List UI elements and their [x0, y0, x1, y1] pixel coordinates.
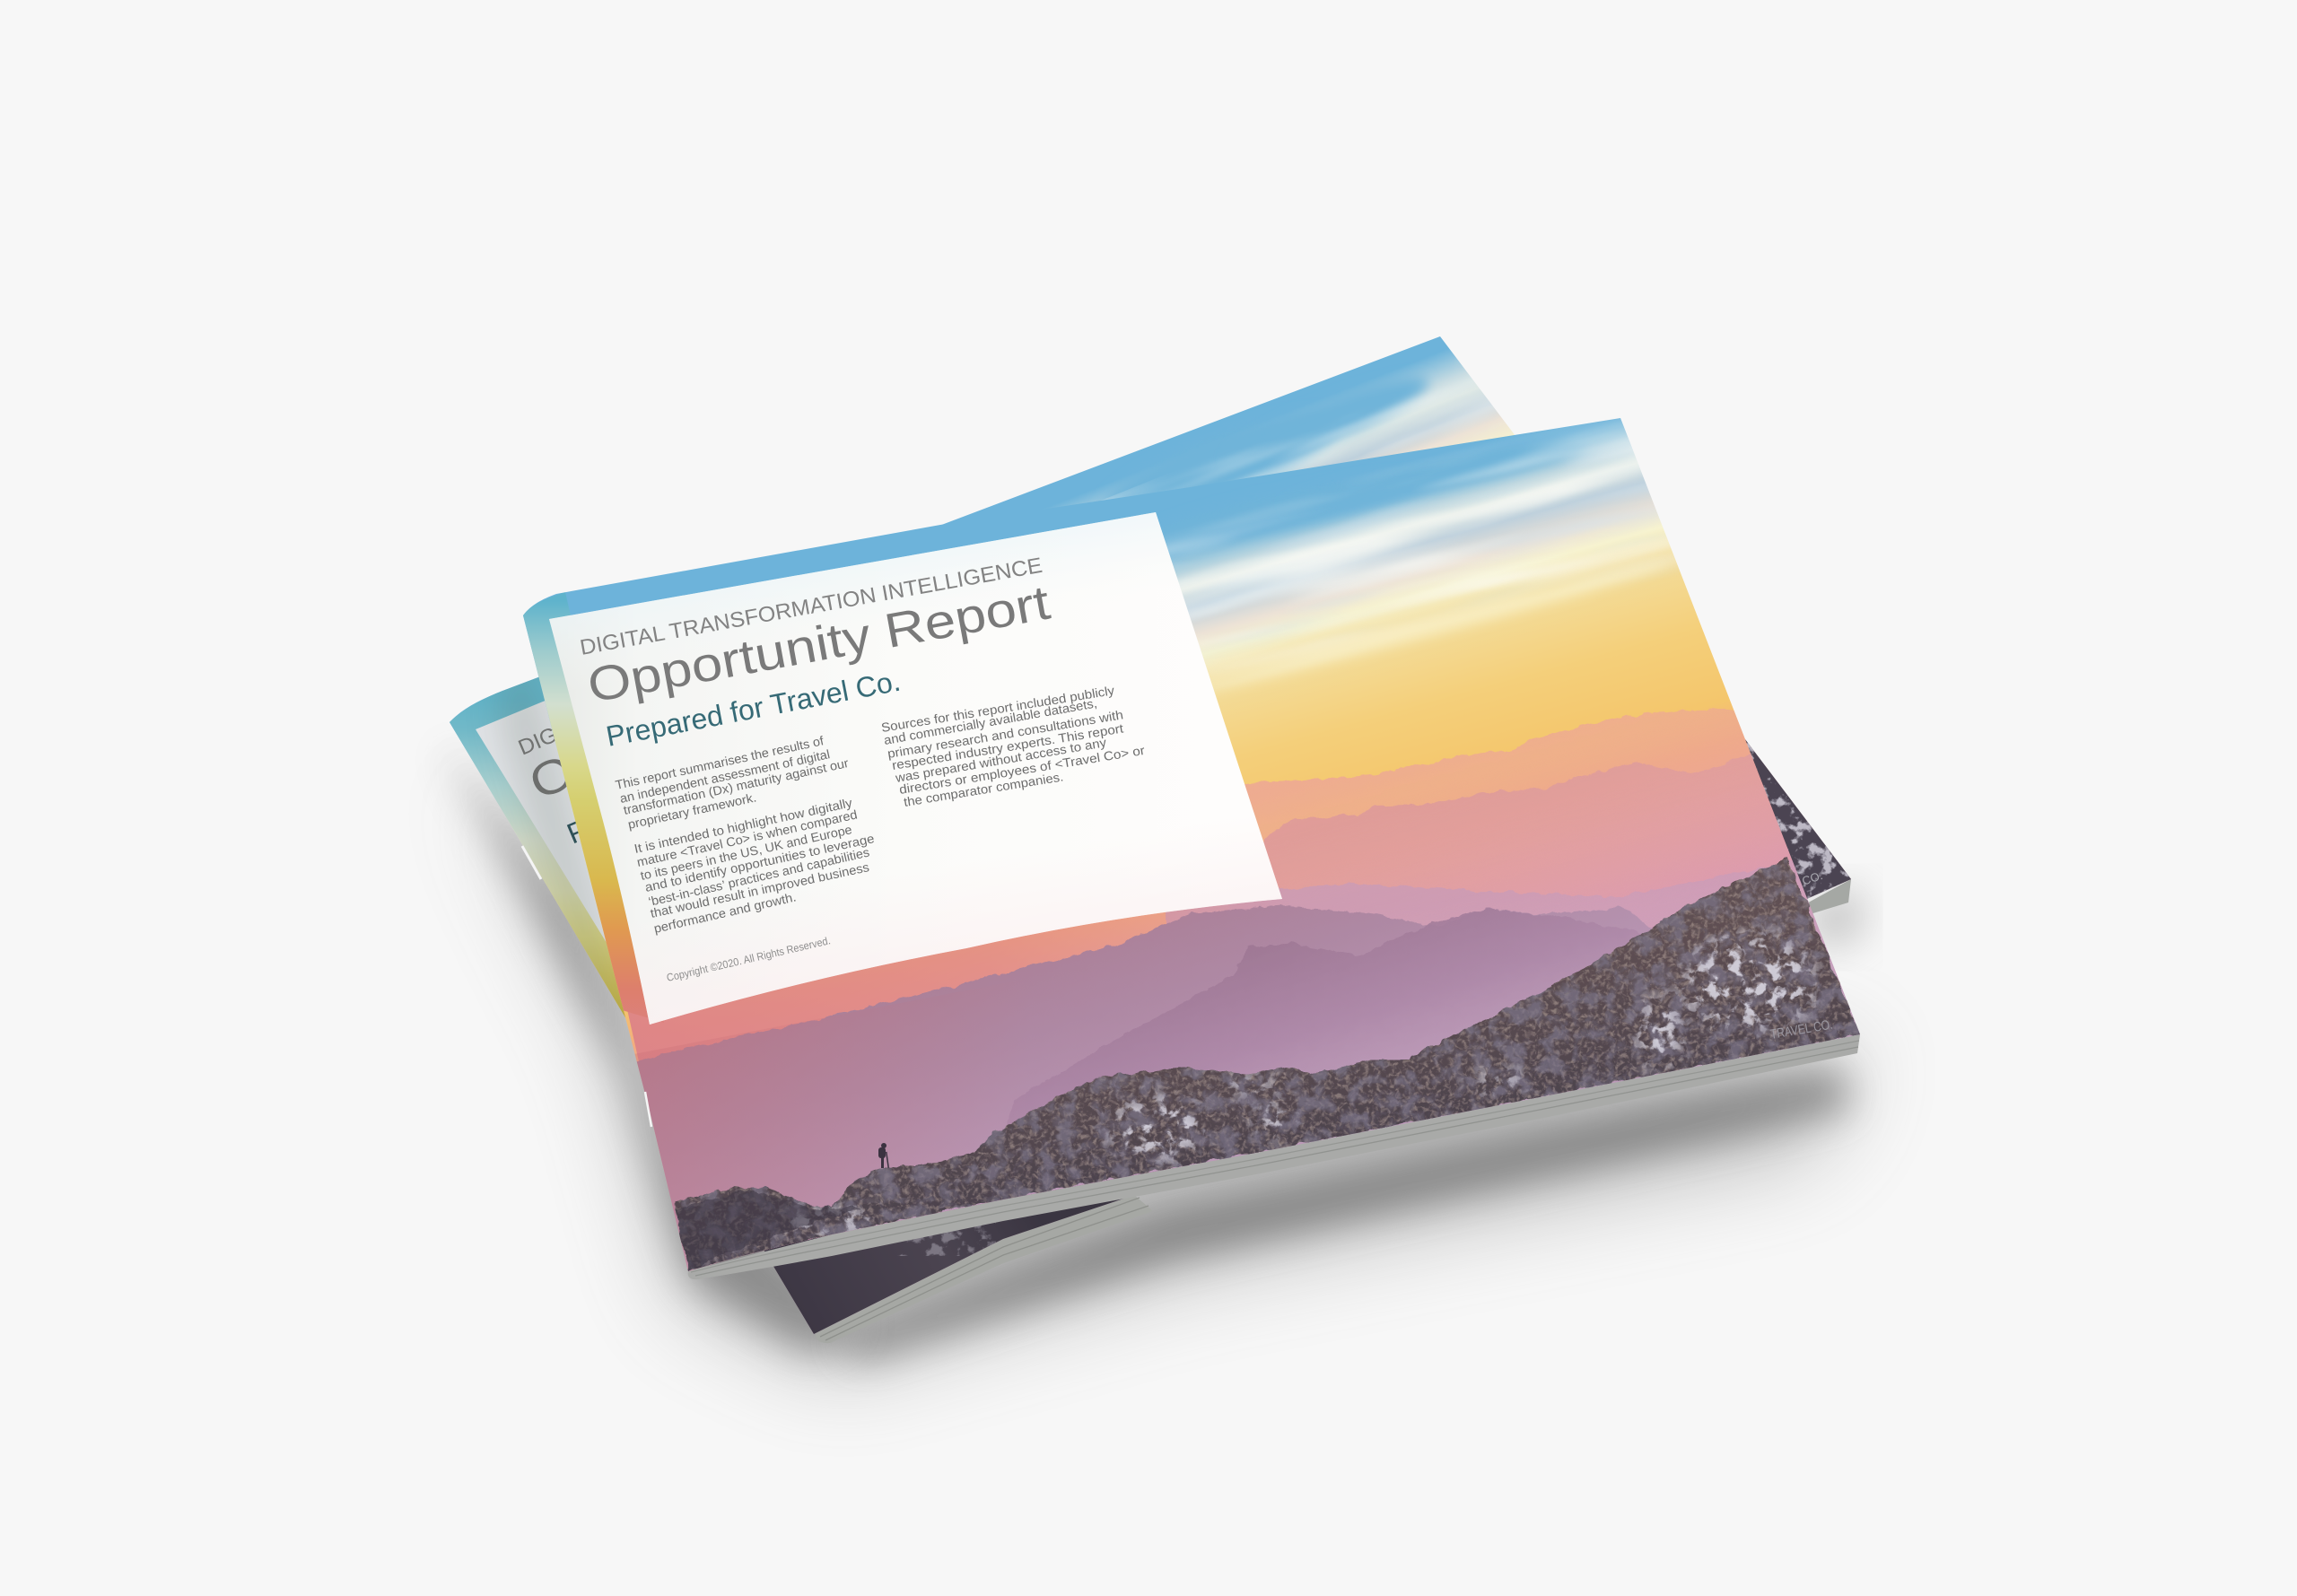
dark rock corner right: [1744, 739, 1851, 899]
wispy clouds: [1164, 418, 1679, 693]
sources paragraph: respected industry experts. This report: [891, 720, 1124, 772]
sources paragraph: was prepared without access to any: [894, 735, 1107, 785]
back booklet footer label: TRAVEL CO.: [1755, 868, 1824, 903]
far and middle ranges: [1166, 708, 1813, 928]
back booklet heading text: DIGITAL TRANSFORMATION INTELLIGENCE: [515, 555, 954, 761]
back booklet heading text: [515, 555, 973, 850]
left colour strip: [519, 592, 664, 1023]
intro paragraph one: proprietary framework.: [626, 789, 757, 832]
front booklet cover art: [523, 418, 1860, 1271]
intro paragraph two: to its peers in the US, UK and Europe: [639, 822, 853, 883]
eyebrow heading: DIGITAL TRANSFORMATION INTELLIGENCE: [578, 554, 1044, 660]
copyright line: Copyright ©2020. All Rights Reserved.: [666, 934, 832, 984]
dark rock wedge bottom: [764, 1166, 1183, 1334]
back booklet spine staple: [522, 846, 541, 879]
intro paragraph two: ‘best-in-class’ practices and capabilities: [647, 844, 870, 909]
left colour strip: [450, 677, 626, 1018]
sources paragraph: [880, 683, 1146, 809]
booklet: back copy: [431, 323, 1884, 1346]
foreground rock: [664, 843, 1866, 1283]
sources paragraph: primary research and consultations with: [886, 707, 1124, 761]
purple ridges: [637, 904, 1653, 1270]
blue band on the back sky: [1102, 424, 1337, 501]
footer label on cover: TRAVEL CO.: [1769, 1017, 1834, 1042]
intro paragraph two: that would result in improved business: [649, 859, 870, 920]
sources paragraph: directors or employees of <Travel Co> or: [898, 743, 1146, 797]
intro paragraph two: It is intended to highlight how digitally: [633, 795, 853, 856]
sources paragraph: Sources for this report included publicly: [880, 683, 1115, 735]
booklet: front copy: [523, 418, 1860, 1279]
intro paragraph one: This report summarises the results of: [614, 733, 825, 792]
back booklet white panel: [476, 538, 1077, 978]
back booklet cover art: [431, 323, 1884, 1346]
sky gradient: [523, 418, 1860, 1251]
intro paragraph two: [633, 795, 876, 936]
intro paragraph one: an independent assessment of digital: [618, 746, 831, 806]
shadows under the two booklets: [444, 745, 1865, 1373]
spine staple on front: [645, 1092, 651, 1127]
back booklet page edges: [816, 879, 1851, 1343]
subtitle: Prepared for Travel Co.: [604, 665, 903, 753]
shadow cast by front booklet onto back booklet: [492, 677, 624, 1016]
intro paragraph two: and to identify opportunities to leverage: [643, 831, 876, 894]
intro paragraph one: transformation (Dx) maturity against our: [622, 755, 850, 817]
intro paragraph one: [614, 733, 850, 832]
sources paragraph: the comparator companies.: [903, 769, 1064, 809]
salmon tint across lower left: [628, 911, 1179, 1269]
sources paragraph: and commercially available datasets,: [883, 695, 1098, 747]
back booklet heading text: Opportunity Report: [522, 579, 973, 810]
main title: Opportunity Report: [583, 576, 1054, 713]
warm tint over the ridge: [635, 1038, 863, 1270]
intro paragraph two: mature <Travel Co> is when compared: [635, 807, 859, 869]
intro paragraph two: performance and growth.: [652, 889, 798, 936]
front booklet page edges: [688, 1034, 1860, 1279]
hiker silhouette: [878, 1143, 889, 1168]
white text panel: [549, 512, 1282, 1025]
back booklet heading text: Prepared for Travel Co.: [563, 704, 848, 850]
